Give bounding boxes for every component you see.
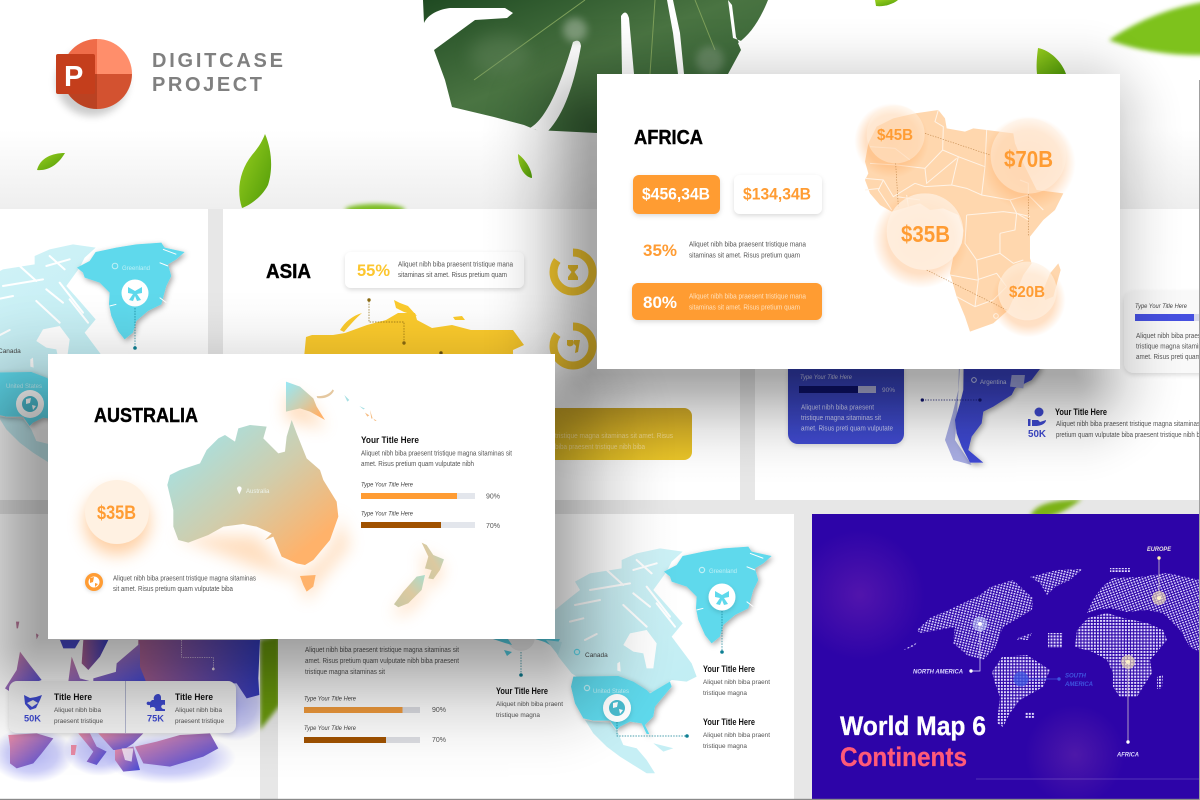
text: lower right (703, 717, 770, 750)
map: australia (167, 382, 444, 616)
map: europe (5, 595, 260, 772)
text: upper right: Aliquet nibh biba praent (703, 679, 770, 686)
text: title 2: praesent tristique (175, 718, 224, 725)
panel: blue stats: Type Your Title Here (800, 374, 852, 381)
leaf: small left (37, 153, 65, 170)
slide: south america (755, 209, 1200, 500)
text block: your title: Your Title Here (361, 435, 419, 446)
title: world map: Continents (840, 742, 967, 772)
text: lower right: Your Title Here (703, 717, 755, 727)
progress bar: 70%: 70% (486, 523, 500, 530)
leaf: blurred behind asia (345, 204, 405, 216)
slide: world map title (795, 514, 1200, 800)
text: upper right: Your Title Here (703, 664, 755, 674)
panel: blue stats: 90% (882, 387, 895, 394)
map label: argentina: Argentina (980, 379, 1007, 386)
slide: north america top-left (0, 209, 208, 500)
text block: your title: Aliquet nibh biba praesent tristique magna sitaminas sit (361, 450, 512, 458)
title: world map (840, 715, 986, 766)
marker: south america (1014, 672, 1093, 688)
map labels: United States (6, 384, 42, 390)
leaf: tiny (518, 154, 532, 178)
title: world map: World Map 6 (840, 711, 986, 741)
icon: ribbon badge (708, 584, 736, 610)
callout: yellow bar: tristique magna sitaminas sit amet. Risus (555, 433, 673, 440)
text: lower right: Aliquet nibh biba praent (703, 732, 770, 739)
text: title 2 (175, 692, 224, 725)
title: africa: AFRICA (634, 127, 703, 149)
paragraph: amet. Risus pretium quam vulputate nibh biba praesent (305, 658, 459, 665)
stat: 35%: 35% (643, 241, 677, 260)
map labels: Greenland (709, 569, 737, 575)
icon: map pins (574, 567, 705, 691)
text: lower right: tristique magna (703, 743, 747, 750)
leaf: blurred bottom (1030, 499, 1082, 518)
glow under circles (854, 103, 1076, 337)
panel: africa (597, 74, 1120, 369)
icon: ribbon badge (122, 280, 148, 306)
progress bar: 70%: Type Your Title Here (361, 510, 413, 518)
text block: globe note: Aliquet nibh biba praesent tristique magna sitaminas (113, 576, 256, 582)
leader lines (521, 611, 722, 736)
stat: $134,34B (734, 175, 822, 214)
text block: your title: amet. Risus pretium quam vulputate nibh (361, 461, 474, 468)
world map dots (903, 568, 1200, 727)
text block: your title: Your Title Here (1055, 407, 1107, 417)
progress bar: 90% (361, 482, 500, 500)
marker: africa: AFRICA (1116, 752, 1139, 758)
stat card: 55% (345, 252, 524, 288)
stat: $456,34B (633, 175, 720, 214)
panel: white stats (1124, 291, 1200, 373)
map labels (585, 569, 737, 695)
progress bar: 70% (361, 510, 500, 530)
brand text: DIGITCASE (152, 50, 283, 72)
progress bar: 90%: Type Your Title Here (361, 482, 413, 488)
text: left (496, 686, 563, 719)
map values: $70B (1004, 146, 1053, 172)
map label: australia: Australia (246, 489, 270, 495)
text: title 1: Aliquet nibh biba (54, 707, 101, 714)
progress bar: 90%: Type Your Title Here (304, 696, 356, 702)
marker: europe (1147, 546, 1172, 605)
map glow: europe (0, 682, 260, 782)
stat: 80%: 80% (643, 293, 677, 312)
map labels: United States (593, 689, 629, 695)
stat: 35% (643, 241, 806, 260)
stat card: 55%: Aliquet nibh biba praesent tristique mana (398, 262, 513, 268)
text: upper right: tristique magna (703, 690, 747, 697)
panel: australia (48, 354, 555, 639)
stat: $134,34B: $134,34B (743, 184, 811, 204)
shadow: australia card (0, 290, 680, 780)
slide: asia (223, 209, 740, 500)
stat: $456,34B: $456,34B (642, 184, 710, 204)
stat: 80%: sitaminas sit amet. Risus pretium quam (689, 304, 800, 312)
map: north america (470, 547, 772, 773)
logo: powerpoint (56, 39, 132, 116)
panel: blue stats: tristique magna sitaminas sit (801, 415, 881, 422)
progress bar: 70% (304, 725, 446, 744)
badge: $35B: $35B (97, 503, 136, 524)
panel: europe stats (9, 681, 236, 733)
title: australia: AUSTRALIA (94, 405, 198, 427)
stat: 80%: Aliquet nibh biba praesent tristique mana (689, 294, 806, 300)
progress bar: 70%: Type Your Title Here (304, 725, 356, 732)
slide: north america bottom (278, 514, 794, 800)
map values (877, 127, 1053, 301)
brand text: PROJECT (152, 74, 262, 96)
map values: $35B (901, 221, 950, 247)
leaf: top edge (875, 0, 898, 6)
map: argentina (920, 369, 1045, 468)
paragraph (305, 647, 459, 676)
text: title 1 (54, 692, 103, 725)
leaf: behind africa card (1037, 48, 1066, 74)
icon: handshake (24, 695, 42, 722)
leaf: gutter green (260, 635, 280, 730)
icon: hand with coin (1028, 408, 1046, 437)
donut: hourglass (554, 252, 592, 292)
panel: blue stats: amet. Risus preti quam vulputate (801, 426, 893, 432)
icon: globe badge (16, 390, 44, 418)
icon: puzzle: 75K (147, 714, 164, 724)
marker: north america: NORTH AMERICA (913, 668, 963, 676)
shadow: africa card (480, 15, 1185, 485)
stat: 80% (632, 283, 822, 320)
leaf: blurred top right (1109, 2, 1200, 55)
stat: 35%: sitaminas sit amet. Risus pretium quam (689, 252, 800, 260)
icon: hand with coin: 50K (1028, 429, 1047, 440)
leaf: center (239, 134, 271, 208)
text: left: Your Title Here (496, 686, 548, 696)
panel: white stats: Type Your Title Here (1135, 303, 1187, 310)
text block: globe note: sit amet. Risus pretium quam vulputate biba (113, 586, 233, 593)
text: title 1: praesent tristique (54, 718, 103, 725)
donut: badge (554, 326, 592, 366)
callout: yellow bar: biba praesent tristique nibh biba (555, 444, 645, 451)
marker: south america: SOUTH (1065, 672, 1086, 680)
progress bar: 70%: 70% (432, 737, 446, 744)
text: title 2: Title Here (175, 692, 213, 702)
map: asia (300, 298, 524, 400)
title: asia: ASIA (266, 261, 311, 283)
marker: south america: AMERICA (1064, 681, 1093, 688)
stat card: 55%: 55% (357, 261, 390, 280)
progress bar: 90%: 90% (486, 494, 500, 500)
text block: globe note (113, 576, 256, 593)
paragraph: Aliquet nibh biba praesent tristique magna sitaminas sit (305, 647, 459, 654)
map values: $45B (877, 127, 913, 144)
map values: $20B (1009, 284, 1045, 301)
progress bar: 90% (304, 696, 446, 714)
brand text (152, 50, 283, 96)
stat: 35%: Aliquet nibh biba praesent tristique mana (689, 242, 806, 248)
leader line (133, 308, 137, 350)
text block: your title (361, 435, 512, 468)
text: title 2: Aliquet nibh biba (175, 707, 222, 714)
icon: globe badge (603, 694, 631, 722)
badge: $35B (84, 480, 150, 555)
map: africa (854, 103, 1076, 337)
text block: your title (1055, 407, 1200, 439)
stat card: 55%: sitaminas sit amet. Risus pretium quam (398, 272, 507, 279)
map labels: Canada (585, 652, 608, 659)
progress bar: 90%: 90% (432, 707, 446, 714)
text: upper right (703, 664, 770, 697)
text: left: tristique magna (496, 712, 540, 719)
map labels (0, 263, 150, 390)
panel: blue stats (786, 369, 906, 448)
map labels: Greenland (122, 266, 150, 272)
leader dots (519, 650, 724, 738)
marker: europe: EUROPE (1147, 546, 1172, 553)
paragraph: tristique magna sitaminas sit (305, 669, 385, 676)
marker: africa (1116, 655, 1139, 758)
callout: yellow bar (520, 408, 692, 460)
map fragment (493, 623, 562, 656)
icon: globe (85, 573, 103, 592)
icon: puzzle (147, 694, 165, 724)
icon: handshake: 50K (24, 714, 41, 724)
marker: north america (913, 616, 988, 676)
panel: blue stats: Aliquet nibh biba praesent (801, 404, 874, 412)
logo: powerpoint: P (64, 61, 83, 93)
leaf: monstera (423, 0, 768, 133)
text: left: Aliquet nibh biba praent (496, 701, 563, 708)
slide: europe (0, 514, 271, 800)
text: title 1: Title Here (54, 692, 92, 702)
